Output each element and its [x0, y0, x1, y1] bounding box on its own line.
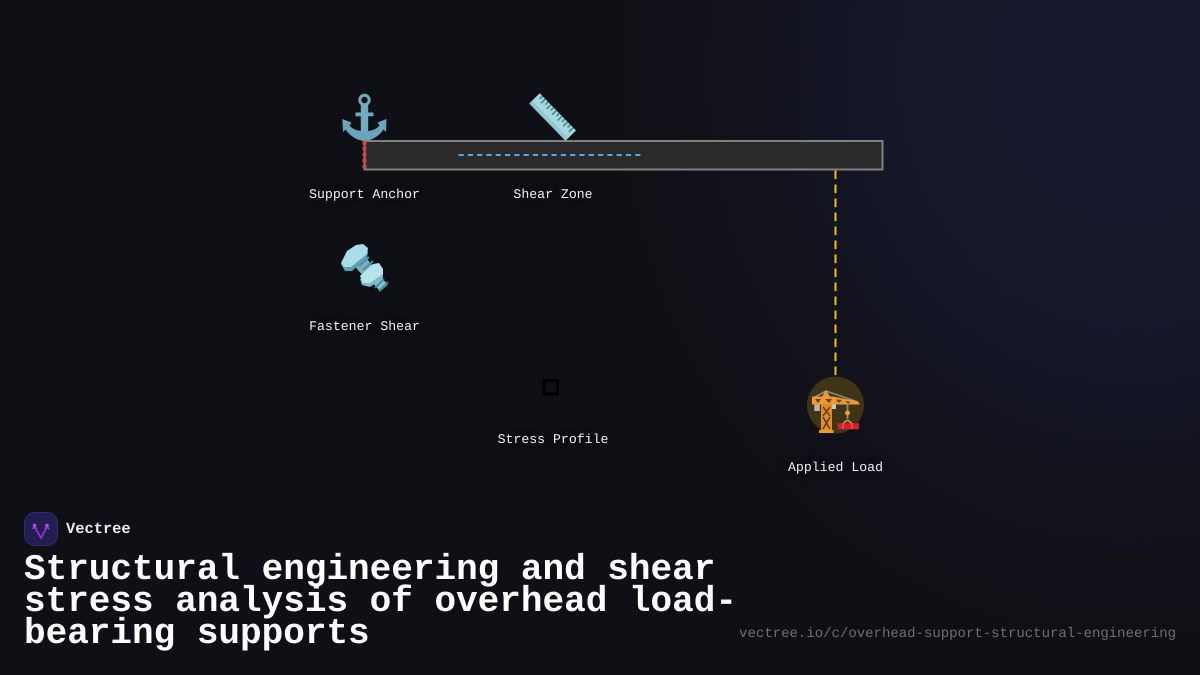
logo icon [24, 512, 58, 546]
title: bearing supports [24, 613, 370, 654]
overhead support beam [364, 141, 882, 170]
label: fastener shear: Fastener Shear [309, 319, 420, 334]
title [24, 548, 737, 654]
icon: crane in glow circle [807, 376, 864, 434]
title: stress analysis of overhead load- [24, 581, 737, 622]
shear zone dashed line [458, 154, 643, 156]
icon: stress profile placeholder square [544, 380, 558, 394]
label: stress profile: Stress Profile [498, 432, 608, 447]
icon: bolt [341, 244, 388, 291]
applied load dashed line [834, 170, 836, 377]
icon: ruler [529, 93, 576, 141]
label: shear zone: Shear Zone [513, 187, 593, 202]
brand name: Vectree [66, 520, 131, 538]
icon: anchor [342, 95, 386, 141]
label: support anchor: Support Anchor [309, 187, 420, 202]
support anchor dotted line [362, 141, 366, 170]
source url: vectree.io/c/overhead-support-structural-engineering [739, 626, 1176, 642]
label: applied load: Applied Load [788, 460, 883, 475]
title: Structural engineering and shear [24, 548, 715, 590]
